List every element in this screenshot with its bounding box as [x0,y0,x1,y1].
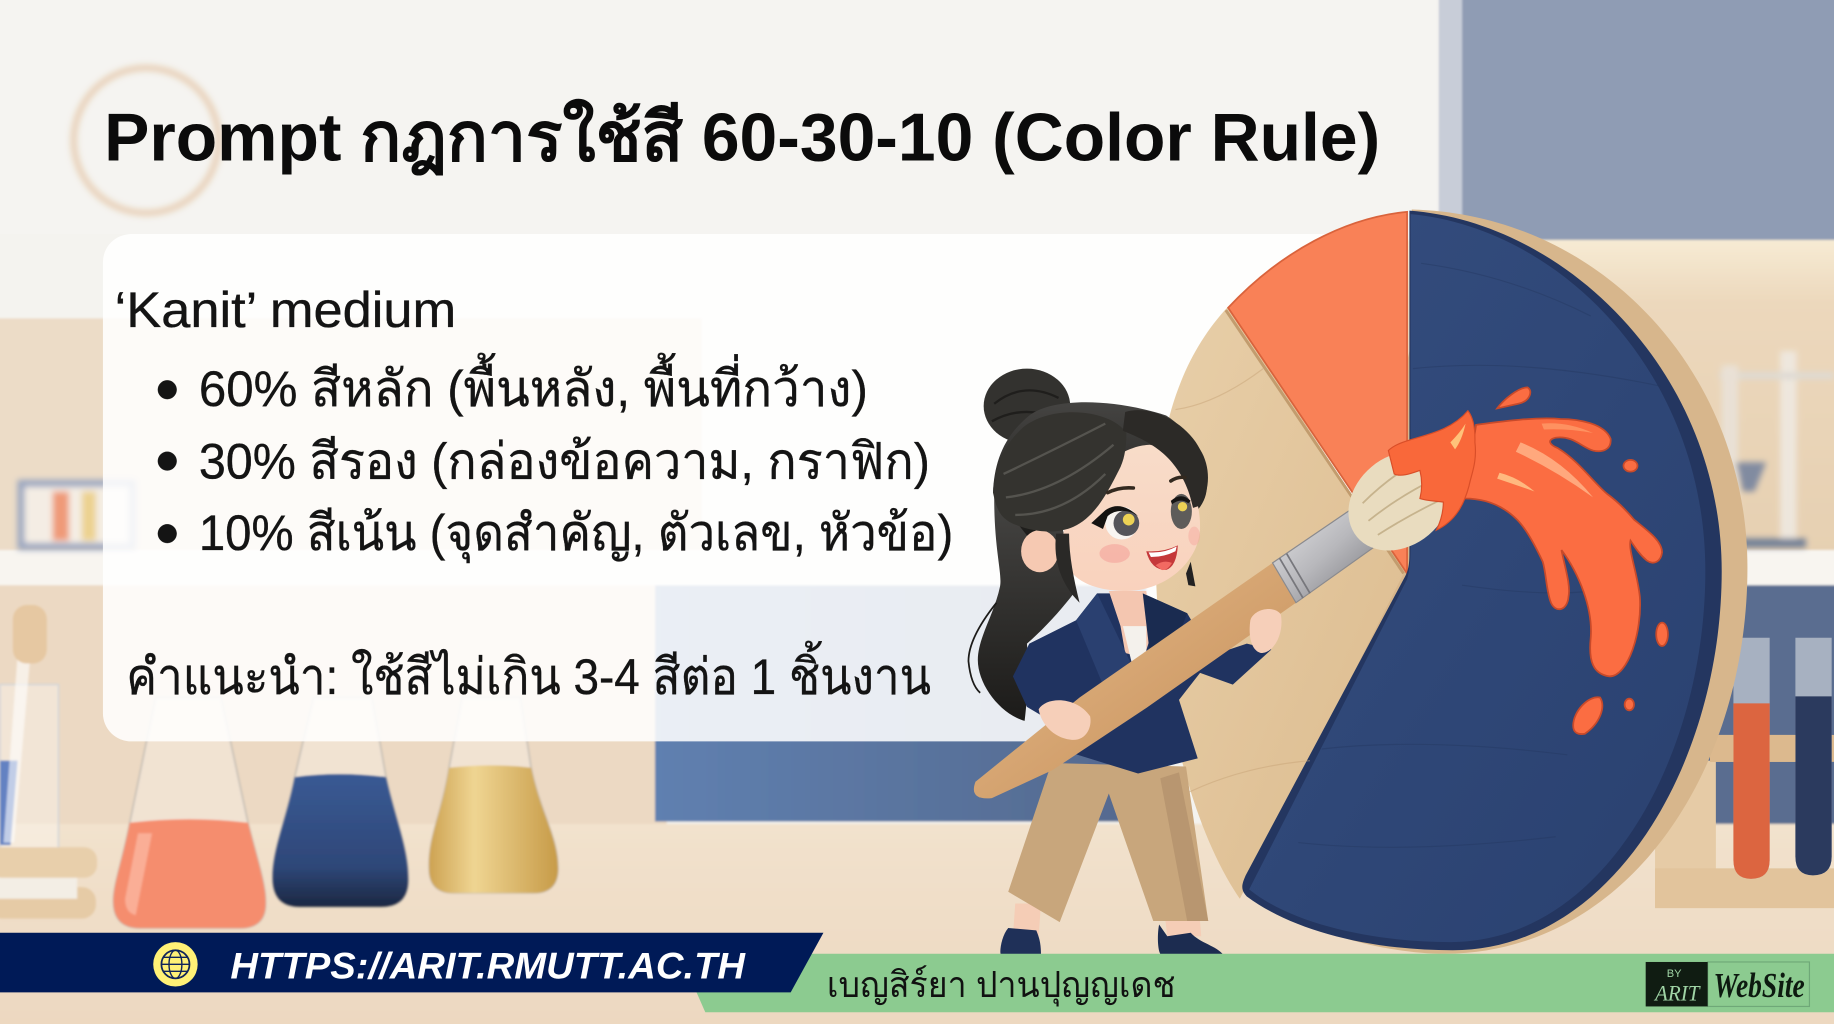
flask: navy [273,697,408,907]
panel: translucent text box [103,234,1366,741]
paint drop [1497,387,1530,408]
pie segment: navy 60 percent [1242,211,1722,950]
neck and shirt [1109,591,1152,658]
paint drop [1656,623,1668,646]
ear [1021,530,1059,572]
character: girl holding a giant brush [968,369,1475,955]
panel: top title band [0,0,1439,234]
test tube rack [1655,638,1834,908]
text block: advice: คำแนะนำ: ใช้สีไม่เกิน 3-4 สีต่อ 1 ชิ้นงาน [126,641,931,705]
flask: coral [113,697,266,928]
paint brush [974,411,1475,798]
test tube: coral [1733,638,1770,879]
cheeks [1099,544,1130,563]
bullet list [158,353,953,563]
test tube: navy [1795,638,1832,875]
wedge seam [1226,310,1404,573]
left hair swoop over the head [993,412,1126,532]
paint dot [1623,460,1638,472]
hands [1039,609,1281,740]
text block: font name: ‘Kanit’ medium [115,281,456,338]
chart: wooden 60-30-10 pie [1155,209,1747,954]
paint splash [1464,387,1668,734]
blazer [1013,593,1271,774]
logo: by ARIT website [1646,962,1809,1006]
bullet: 10 percent: 10% สีเน้น (จุดสำคัญ, ตัวเลข, หัวข้อ) [199,504,953,563]
brush handle [974,563,1296,798]
pie segment: tan 30 percent [1155,307,1404,899]
blurred lab stand [1719,351,1834,548]
icon: globe [153,942,198,987]
decorative ring on the wall [74,68,219,213]
strand in front of the ear [1055,534,1080,603]
blurred shelf bottle tray [21,483,132,547]
pie wooden rim [1287,209,1747,954]
main paint flow [1464,418,1662,676]
paint dot [1625,699,1634,710]
pie segment: coral 10 percent [1228,212,1407,573]
footer: green author bar [692,954,1834,1012]
url text: HTTPS://ARIT.RMUTT.AC.TH [230,944,746,986]
flask: gold [429,697,558,893]
eyes [1091,494,1192,540]
author name: เบญสิร์ยา ปานปุญญเดช [827,964,1175,1007]
eyebrows [1108,488,1133,493]
footer: url bar [0,933,823,992]
hair cap [993,402,1207,538]
bullet: 60 percent: 60% สีหลัก (พื้นหลัง, พื้นที่กว้าง) [199,353,868,417]
blazer lapels [1076,593,1130,690]
brush ferrule [1273,510,1373,603]
legs and shoes [1000,763,1223,955]
dropper and glass jar [0,605,97,919]
mouth [1146,545,1178,570]
brush bristles [1328,431,1472,571]
logo: by ARIT website: BY [1667,968,1682,980]
hair bun [984,369,1070,444]
right hair swoop [1123,410,1208,508]
face [1062,445,1200,591]
wood grain lines [1298,263,1661,847]
logo: by ARIT website: WebSite [1714,966,1805,1005]
title: Prompt กฎการใช้สี 60-30-10 (Color Rule) [104,97,1380,175]
paint drop [1573,697,1602,734]
long hair back [978,497,1074,721]
pants [1008,763,1208,922]
logo: by ARIT website: ARIT [1653,981,1701,1006]
paint on brush tip [1388,411,1475,530]
bullet: 30 percent: 30% สีรอง (กล่องข้อความ, กราฟิก) [199,433,930,490]
